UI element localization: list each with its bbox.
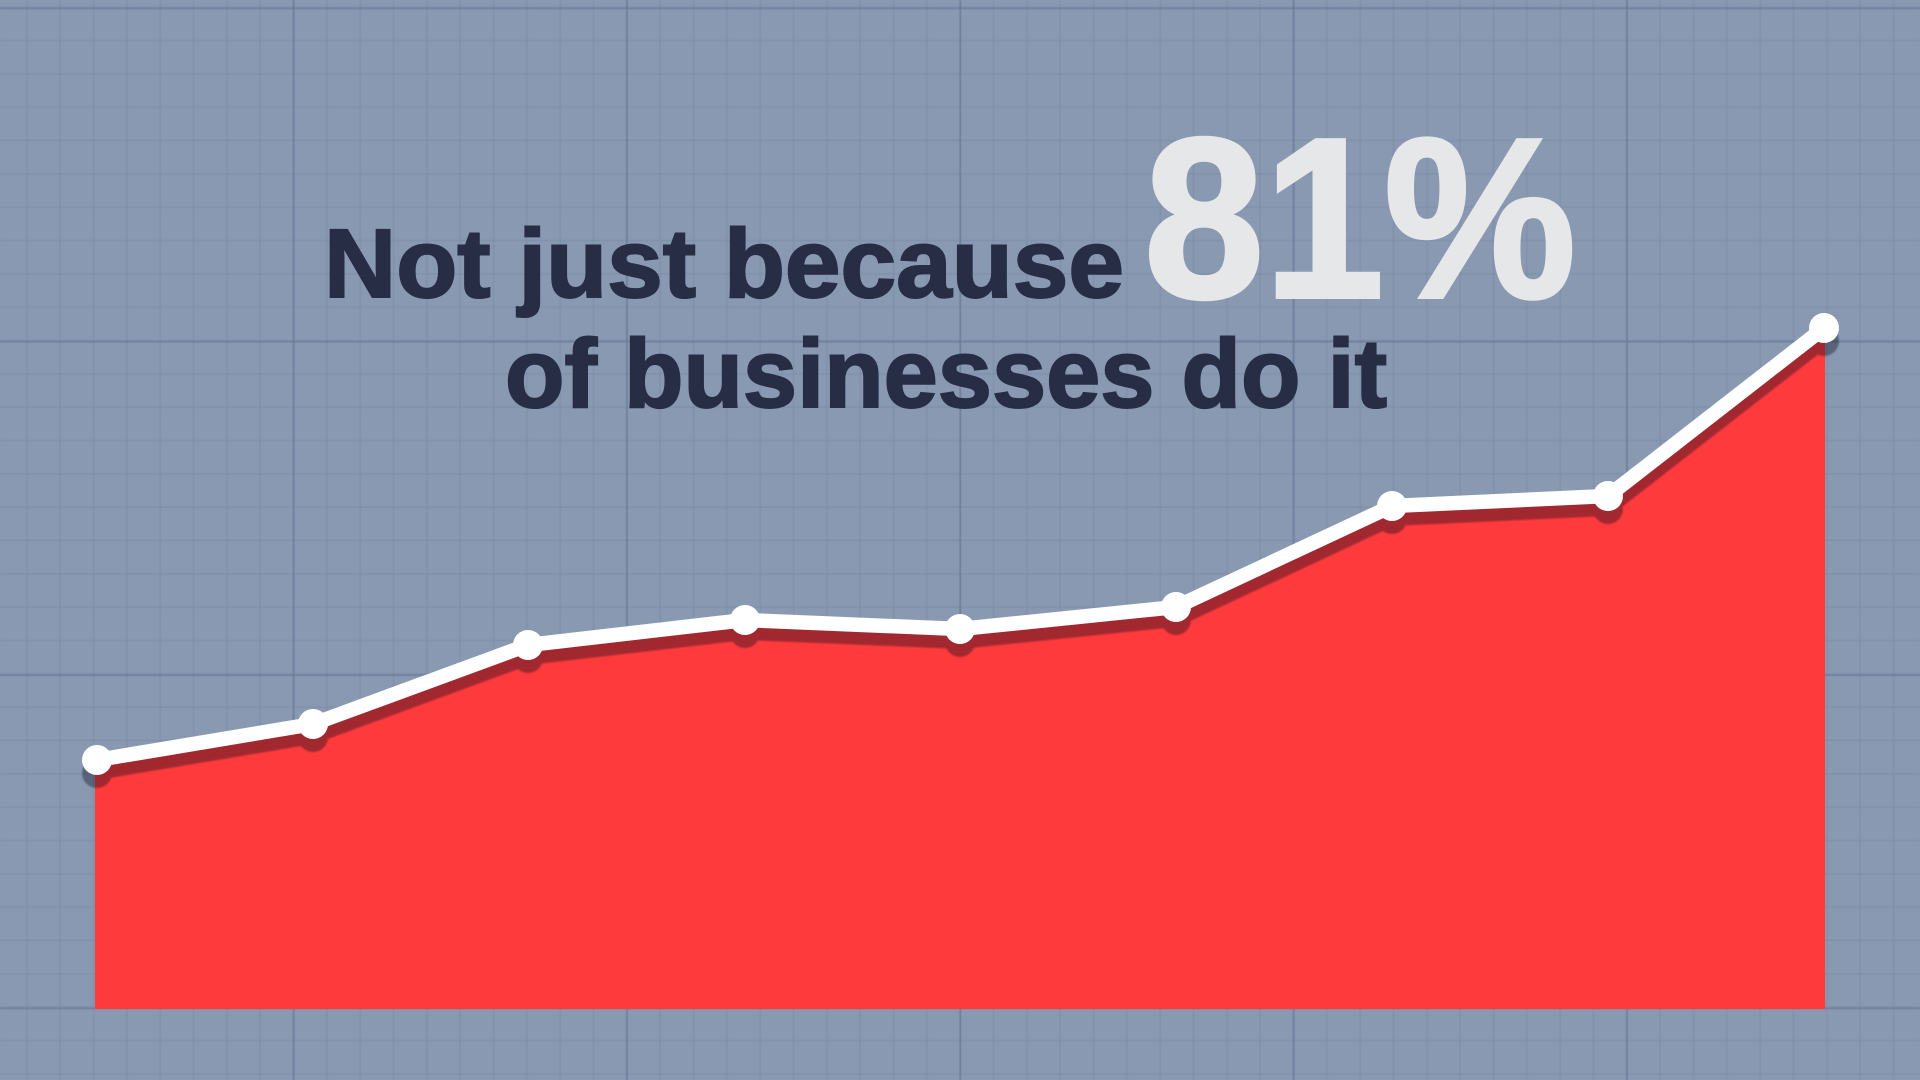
red area fill bbox=[95, 328, 1825, 1009]
headline line 1: Not just because bbox=[324, 209, 1124, 318]
line and marker shadow bbox=[82, 326, 1839, 788]
big stat: 81% bbox=[1144, 92, 1576, 346]
chart: area line chart bbox=[82, 313, 1839, 1009]
white data markers bbox=[82, 313, 1839, 775]
headline line 2: of businesses do it bbox=[505, 319, 1387, 428]
white trend line bbox=[97, 328, 1824, 760]
